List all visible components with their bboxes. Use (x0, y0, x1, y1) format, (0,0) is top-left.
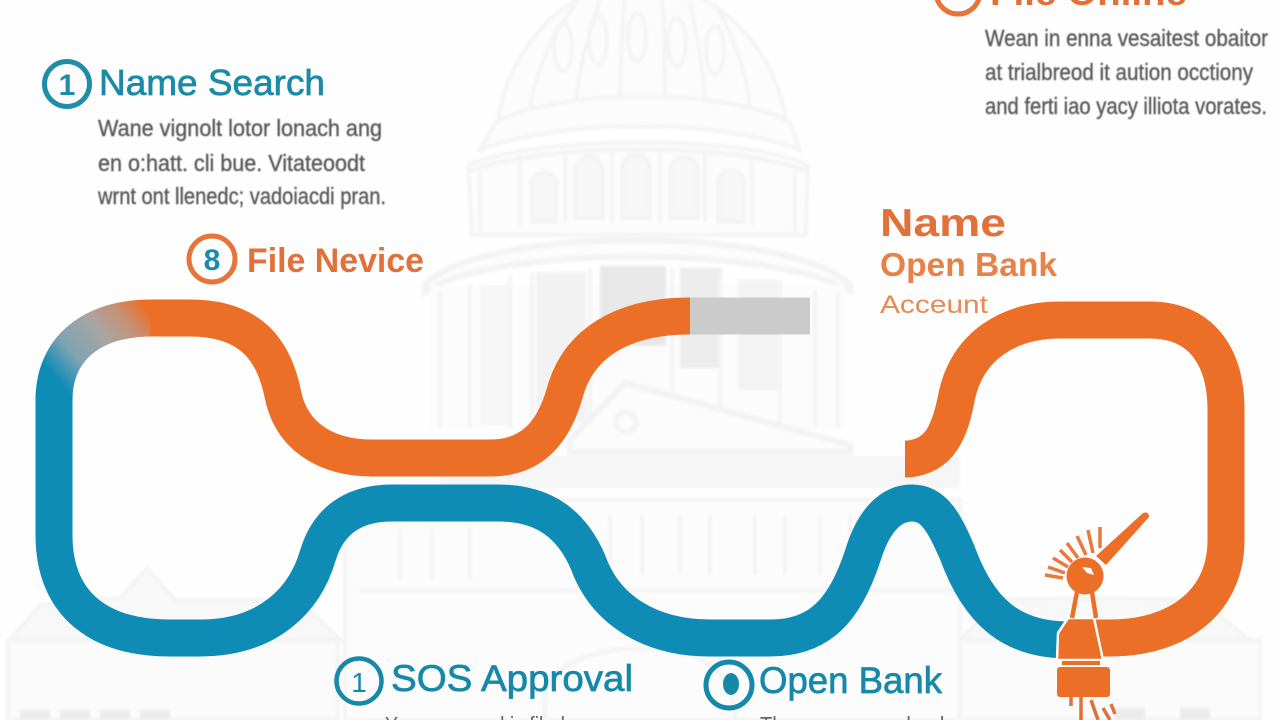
road transition blue to orange (54, 318, 152, 400)
step: File Nevice: File Nevice (247, 242, 424, 280)
step: File Online (936, 0, 1268, 119)
bird harness (1062, 661, 1100, 665)
icon: orange bird mascot (1045, 512, 1149, 720)
step: Name Open Bank Account label: Open Bank (880, 246, 1058, 283)
winding road: grey unfinished section (690, 298, 810, 334)
winding road: orange left section (150, 316, 690, 458)
bird crest rays (1045, 527, 1100, 578)
step: Name Search (44, 62, 386, 209)
step: File Online: at trialbreod it aution occtiony (985, 59, 1253, 85)
bird head (1066, 558, 1104, 594)
step: File Nevice: 8 (204, 244, 220, 277)
step: Name Search: wrnt ont llenedc; vadoiacdi pran. (97, 183, 386, 209)
bird eye (1082, 567, 1094, 575)
step: SOS Approval: 1 (351, 667, 367, 698)
step: SOS Approval (336, 658, 633, 720)
step: Name Open Bank Account label: Name (880, 202, 1006, 245)
bird body (1057, 618, 1103, 660)
step: Name Search: Wane vignolt lotor lonach ang (98, 115, 382, 141)
bird tail strokes (1071, 697, 1115, 720)
step: Name Search: en o:hatt. cli bue. Vitateoodt (98, 150, 366, 176)
step: Name Open Bank Account label (880, 202, 1058, 319)
bird neck (1072, 592, 1096, 618)
step: Name Search: Name Search (99, 62, 325, 103)
bird bag (1057, 667, 1110, 697)
step: Name Open Bank Account label: Acceunt (880, 291, 988, 319)
bird beak (1096, 512, 1149, 565)
step: Open Bank: Open Bank (759, 660, 942, 701)
step: Open Bank (706, 660, 950, 720)
step: SOS Approval: SOS Approval (391, 658, 633, 699)
step: File Nevice (189, 236, 424, 282)
winding road: orange right section (905, 320, 1226, 638)
winding road: blue section (54, 316, 1226, 640)
step: Name Search: 1 (59, 69, 75, 102)
